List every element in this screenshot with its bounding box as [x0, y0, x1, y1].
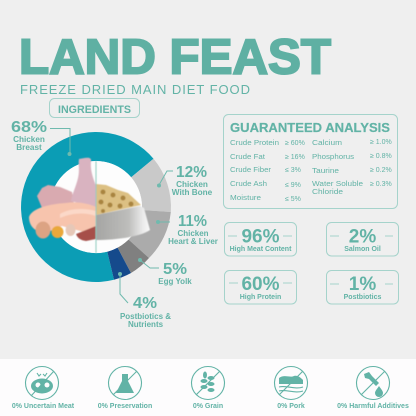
analysis left column: ≥ 60% [285, 140, 305, 147]
analysis right column: ≥ 0.3% [370, 181, 392, 188]
stat: 96% high meat content: High Meat Content [230, 246, 292, 253]
panel: free-from band [0, 359, 416, 416]
icon: pork [274, 366, 308, 400]
stat: 96% high meat content: 96% [241, 226, 280, 248]
label: uncertain meat: 0% Uncertain Meat [12, 403, 75, 410]
stat: 60% high protein: 60% [241, 274, 280, 295]
label: pork: 0% Pork [277, 403, 305, 410]
callout: 12% chicken with bone [157, 164, 213, 197]
icon: grain [192, 366, 224, 400]
segment: heart and liver 11% [128, 210, 171, 258]
analysis left column: Moisture [230, 195, 261, 202]
analysis right column: Phosphorus [312, 154, 355, 161]
callout: 12% chicken with bone: With Bone [172, 188, 213, 197]
callout: 68% chicken breast [11, 119, 72, 156]
divider [96, 161, 97, 253]
panel: guaranteed analysis [224, 114, 398, 208]
callout: 4% postbiotics [118, 272, 171, 329]
analysis left column: Crude Protein [230, 140, 279, 147]
icon: preservation [108, 366, 142, 400]
callout: 68% chicken breast: Chicken [13, 135, 45, 144]
analysis left column: ≤ 3% [285, 167, 301, 174]
stat: 1% postbiotics: Postbiotics [344, 294, 381, 301]
stat: 2% salmon oil [326, 222, 398, 256]
label: preservation: 0% Preservation [98, 403, 152, 410]
stat: 60% high protein: High Protein [240, 294, 281, 301]
callout: 11% heart and liver: Heart & Liver [168, 237, 218, 246]
stat: 60% high protein [224, 270, 296, 304]
callout: 5% egg yolk: 5% [163, 261, 187, 278]
callout: 12% chicken with bone: Chicken [176, 180, 208, 189]
callout: 11% heart and liver [156, 213, 218, 246]
callout: 4% postbiotics: Nutrients [128, 320, 164, 329]
analysis right column: ≥ 0.2% [370, 167, 392, 174]
raw meat [37, 185, 74, 208]
stat: 2% salmon oil: Salmon Oil [344, 246, 381, 253]
callout: 11% heart and liver: Chicken [177, 229, 209, 238]
callout: 68% chicken breast: Breast [16, 143, 42, 152]
callout: 5% egg yolk: Egg Yolk [158, 277, 192, 286]
analysis left column: Crude Ash [230, 181, 267, 188]
dried kibble [96, 184, 141, 215]
callout: 11% heart and liver: 11% [178, 213, 207, 230]
analysis right column: Water Soluble [312, 181, 363, 188]
analysis right column: Calcium [312, 140, 342, 147]
analysis left column [230, 140, 305, 203]
icon: harmful additives [356, 366, 390, 400]
analysis left column: Crude Fat [230, 154, 265, 161]
analysis left column: Crude Fiber [230, 167, 272, 174]
analysis right column: ≥ 1.0% [370, 139, 392, 146]
stat: 1% postbiotics [326, 270, 398, 304]
analysis left column: ≥ 16% [285, 154, 305, 161]
stat: 96% high meat content [224, 222, 296, 256]
analysis right column: Chloride [312, 189, 343, 196]
steel bowl [96, 206, 150, 240]
label: grain: 0% Grain [193, 403, 223, 410]
title: LAND FEAST [19, 30, 331, 84]
callout: 68% chicken breast: 68% [11, 119, 47, 136]
heading: GUARANTEED ANALYSIS [230, 120, 390, 135]
segment: chicken with bone 12% [131, 159, 171, 212]
ingredients heading [50, 98, 140, 118]
analysis right column: Taurine [312, 168, 339, 175]
stat: 1% postbiotics: 1% [349, 274, 376, 295]
analysis left column: ≤ 9% [285, 182, 301, 189]
food photo [29, 158, 150, 253]
callout: 4% postbiotics: Postbiotics & [120, 312, 171, 321]
callout: 12% chicken with bone: 12% [176, 164, 207, 181]
analysis right column [312, 139, 392, 196]
ingredients heading: INGREDIENTS [58, 104, 131, 116]
analysis right column: ≥ 0.8% [370, 153, 392, 160]
callout: 4% postbiotics: 4% [133, 295, 157, 312]
segment: chicken breast 68% [21, 132, 153, 282]
callout: 5% egg yolk [138, 258, 192, 286]
analysis left column: ≤ 5% [285, 196, 301, 203]
subtitle: FREEZE DRIED MAIN DIET FOOD [20, 82, 250, 97]
stat: 2% salmon oil: 2% [349, 226, 376, 248]
segment: egg yolk 5% [118, 240, 149, 273]
donut chart [21, 132, 171, 282]
label: harmful additives: 0% Harmful Additives [337, 403, 409, 410]
segment: postbiotics 4% [107, 248, 131, 280]
icon: uncertain meat [26, 366, 58, 400]
